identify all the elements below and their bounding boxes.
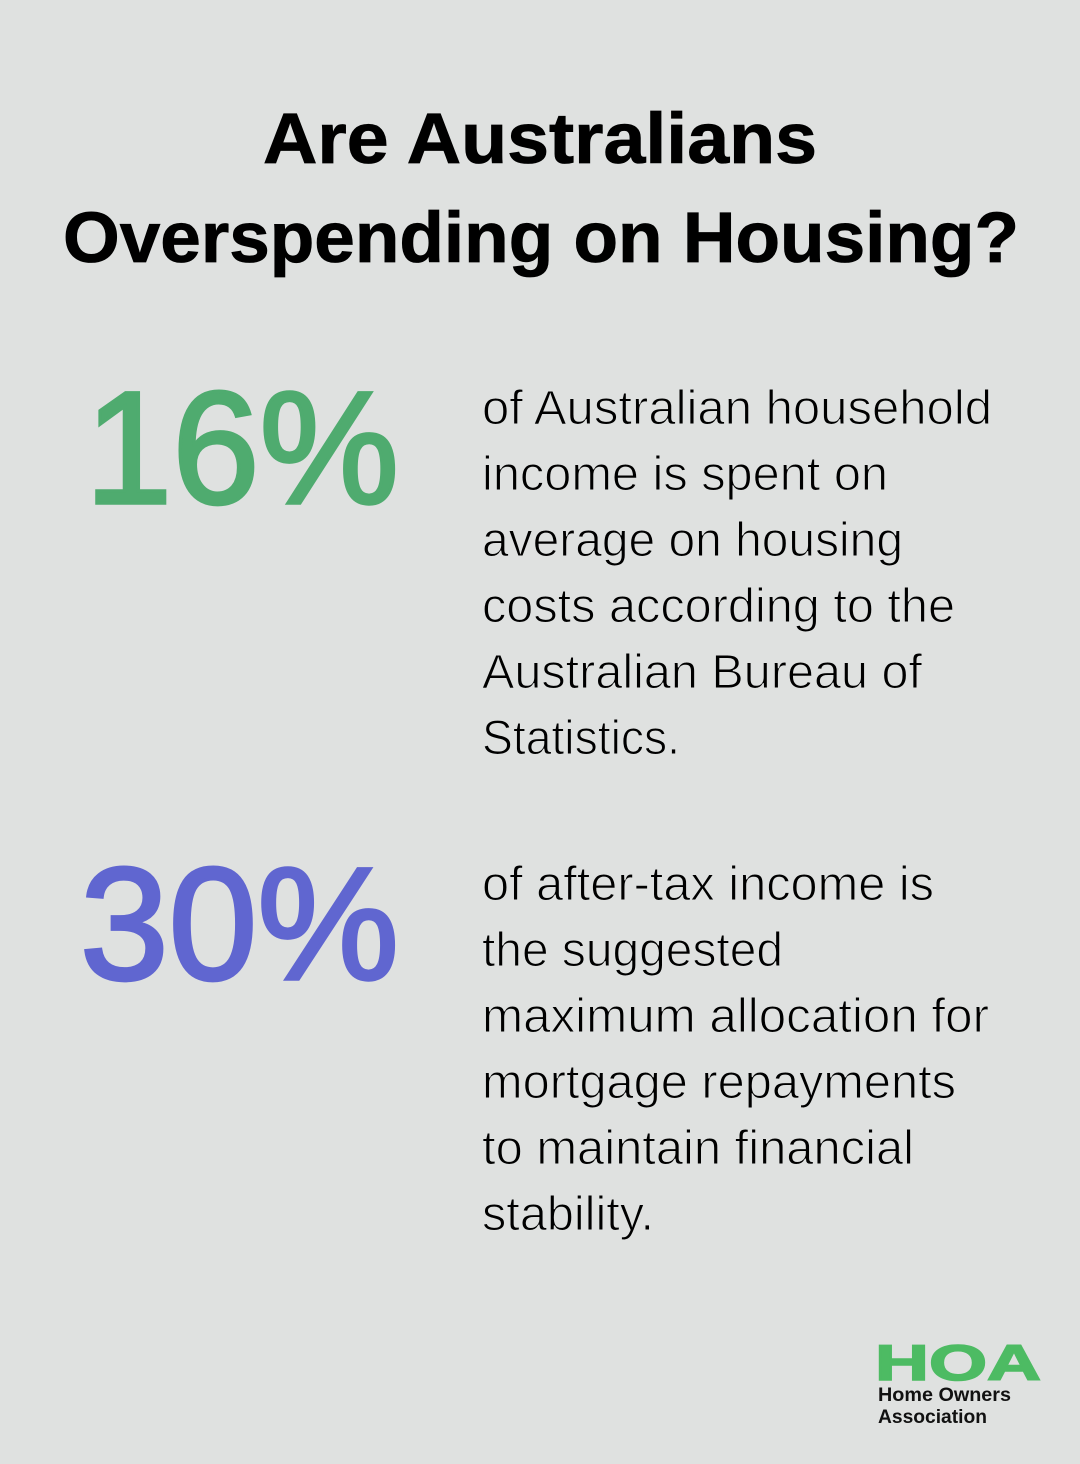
- text block: 16% description: income is spent on: [482, 448, 888, 501]
- text block: 30% description: stability.: [482, 1188, 654, 1241]
- title: [63, 100, 1019, 278]
- text block: 16% description: of Australian household: [482, 382, 992, 435]
- text block: 16% description: [482, 382, 992, 765]
- text block: 30% description: to maintain financial: [482, 1122, 914, 1175]
- logo: HOA Home Owners Association: Association: [878, 1407, 987, 1428]
- text block: 16% description: Australian Bureau of: [482, 646, 923, 699]
- title: Are Australians: [263, 100, 817, 179]
- text block: 16% description: average on housing: [482, 514, 903, 567]
- title: Overspending on Housing?: [63, 199, 1019, 278]
- text block: 16% description: costs according to the: [482, 580, 955, 633]
- text block: 30% description: mortgage repayments: [482, 1056, 956, 1109]
- text block: 16% description: Statistics.: [482, 712, 680, 765]
- text block: 30% description: of after-tax income is: [482, 858, 934, 911]
- stat: 30%: 30%: [80, 834, 399, 1013]
- text block: 30% description: the suggested: [482, 924, 783, 977]
- text block: 30% description: [482, 858, 989, 1241]
- stat: 16%: 16%: [85, 358, 399, 537]
- text block: 30% description: maximum allocation for: [482, 990, 989, 1043]
- logo: HOA Home Owners Association: HOA: [875, 1335, 1041, 1391]
- logo: HOA Home Owners Association: [875, 1335, 1041, 1428]
- logo: HOA Home Owners Association: Home Owners: [878, 1385, 1011, 1406]
